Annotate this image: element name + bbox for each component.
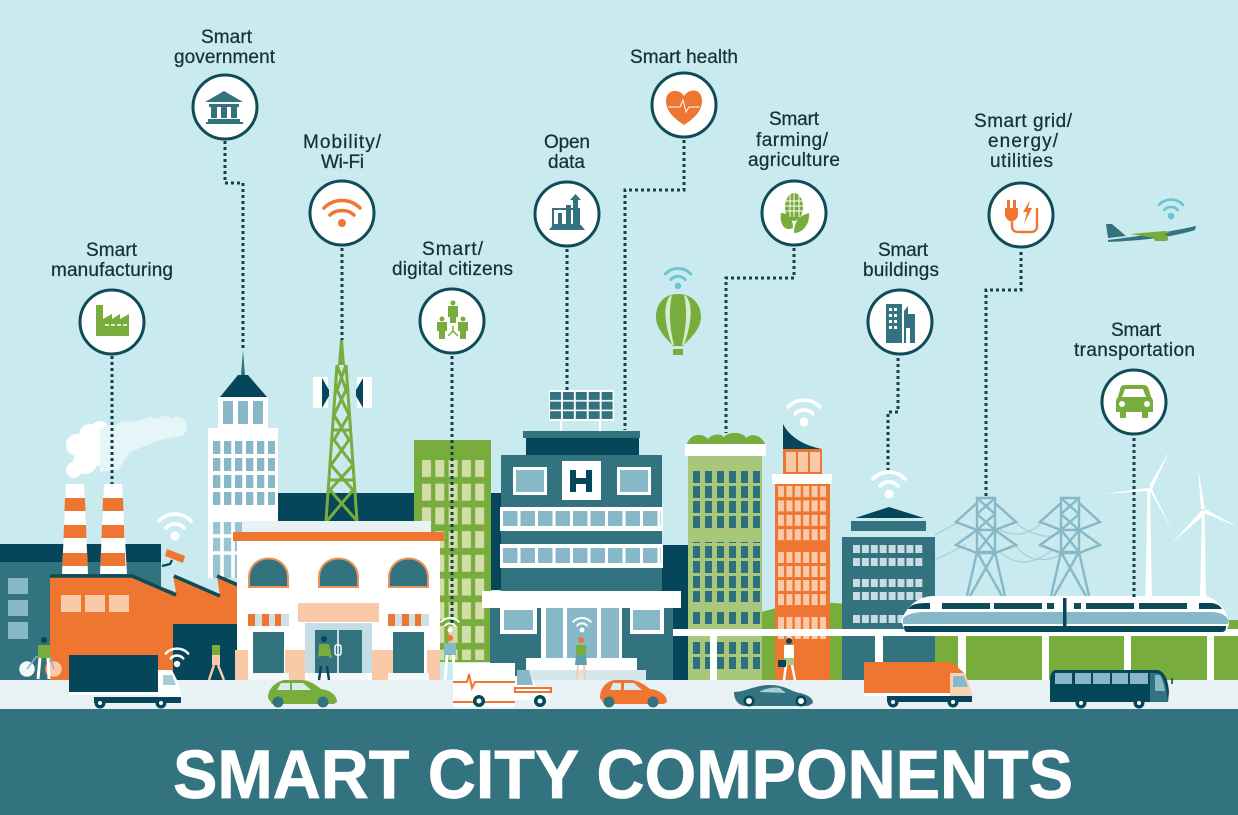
factory [50, 576, 238, 680]
woman at hospital [575, 637, 587, 679]
node: smart farming agriculture: farming/ [756, 130, 829, 151]
node: smart manufacturing: manufacturing [51, 260, 173, 281]
node: smart government [174, 27, 276, 139]
airplane with wifi [1106, 200, 1196, 242]
city bus [1050, 670, 1172, 708]
node: smart transportation: Smart [1111, 320, 1162, 341]
dark band behind shop [278, 493, 414, 523]
node: open data: data [548, 152, 585, 173]
node: smart digital citizens [392, 239, 513, 353]
node: smart government: Smart [201, 27, 253, 48]
green car [268, 680, 337, 708]
person with bicycle [18, 637, 62, 679]
node: mobility wi-fi [303, 132, 382, 245]
rooftop solar panel [549, 390, 614, 431]
node: mobility wi-fi: Mobility/ [303, 132, 382, 153]
shop awnings [248, 614, 429, 629]
node: smart transportation: transportation [1074, 340, 1195, 361]
node: smart grid energy utilities: utilities [990, 151, 1053, 172]
citizen in blue [444, 635, 456, 680]
node: smart government: government [174, 47, 276, 68]
white tower: smart government [208, 350, 278, 578]
node: smart transportation [1074, 320, 1195, 434]
node: smart buildings: buildings [863, 260, 939, 281]
power transmission towers [935, 498, 1100, 596]
title: SMART CITY COMPONENTS [173, 736, 1073, 813]
hot air balloon with wifi [656, 268, 701, 355]
green office building [414, 440, 491, 662]
node: smart health [630, 47, 738, 137]
node: smart grid energy utilities: Smart grid/ [974, 111, 1073, 132]
green roof building [685, 433, 766, 680]
wind turbines [1104, 450, 1238, 597]
dark delivery truck [69, 655, 181, 708]
elevated rail with pillars [673, 629, 1238, 680]
node: smart farming agriculture [748, 109, 840, 245]
road [0, 680, 1238, 709]
factory chimneys [62, 484, 127, 574]
connector lines [112, 140, 1134, 625]
node: smart grid energy utilities: energy/ [988, 131, 1059, 152]
teal apartment building [842, 507, 935, 680]
hospital building [482, 431, 688, 680]
node: smart farming agriculture: agriculture [748, 150, 840, 171]
high-speed train [901, 596, 1229, 632]
node: open data: Open [544, 132, 590, 153]
hospital H sign [562, 461, 601, 500]
title banner [0, 709, 1238, 815]
orange car [600, 680, 667, 708]
node: smart health: Smart health [630, 47, 738, 68]
teal sedan [734, 685, 813, 706]
shop arched windows [249, 558, 428, 587]
orange delivery truck [864, 662, 972, 708]
node: smart grid energy utilities [974, 111, 1073, 247]
node: smart digital citizens: Smart/ [422, 239, 484, 260]
shop building [233, 521, 444, 680]
white wifi signals on buildings [159, 400, 905, 667]
node: mobility wi-fi: Wi-Fi [321, 152, 364, 173]
label: smart manufacturing: Smart [86, 240, 138, 261]
ambulance [453, 663, 551, 707]
woman at shop door [318, 636, 332, 680]
businesswoman with briefcase [778, 638, 795, 680]
node: smart buildings [863, 240, 939, 354]
node: smart farming agriculture: Smart [769, 109, 820, 130]
security camera [162, 549, 185, 566]
node: smart digital citizens: digital citizens [392, 259, 513, 280]
node: smart buildings: Smart [878, 240, 929, 261]
node: smart manufacturing [51, 240, 173, 354]
rear teal building [0, 544, 161, 680]
factory smoke [66, 416, 187, 478]
node: open data [535, 132, 599, 246]
pedestrian walking near factory [209, 638, 224, 680]
green hill background [762, 602, 1238, 680]
orange tower [772, 424, 832, 680]
telecom tower [313, 340, 372, 521]
